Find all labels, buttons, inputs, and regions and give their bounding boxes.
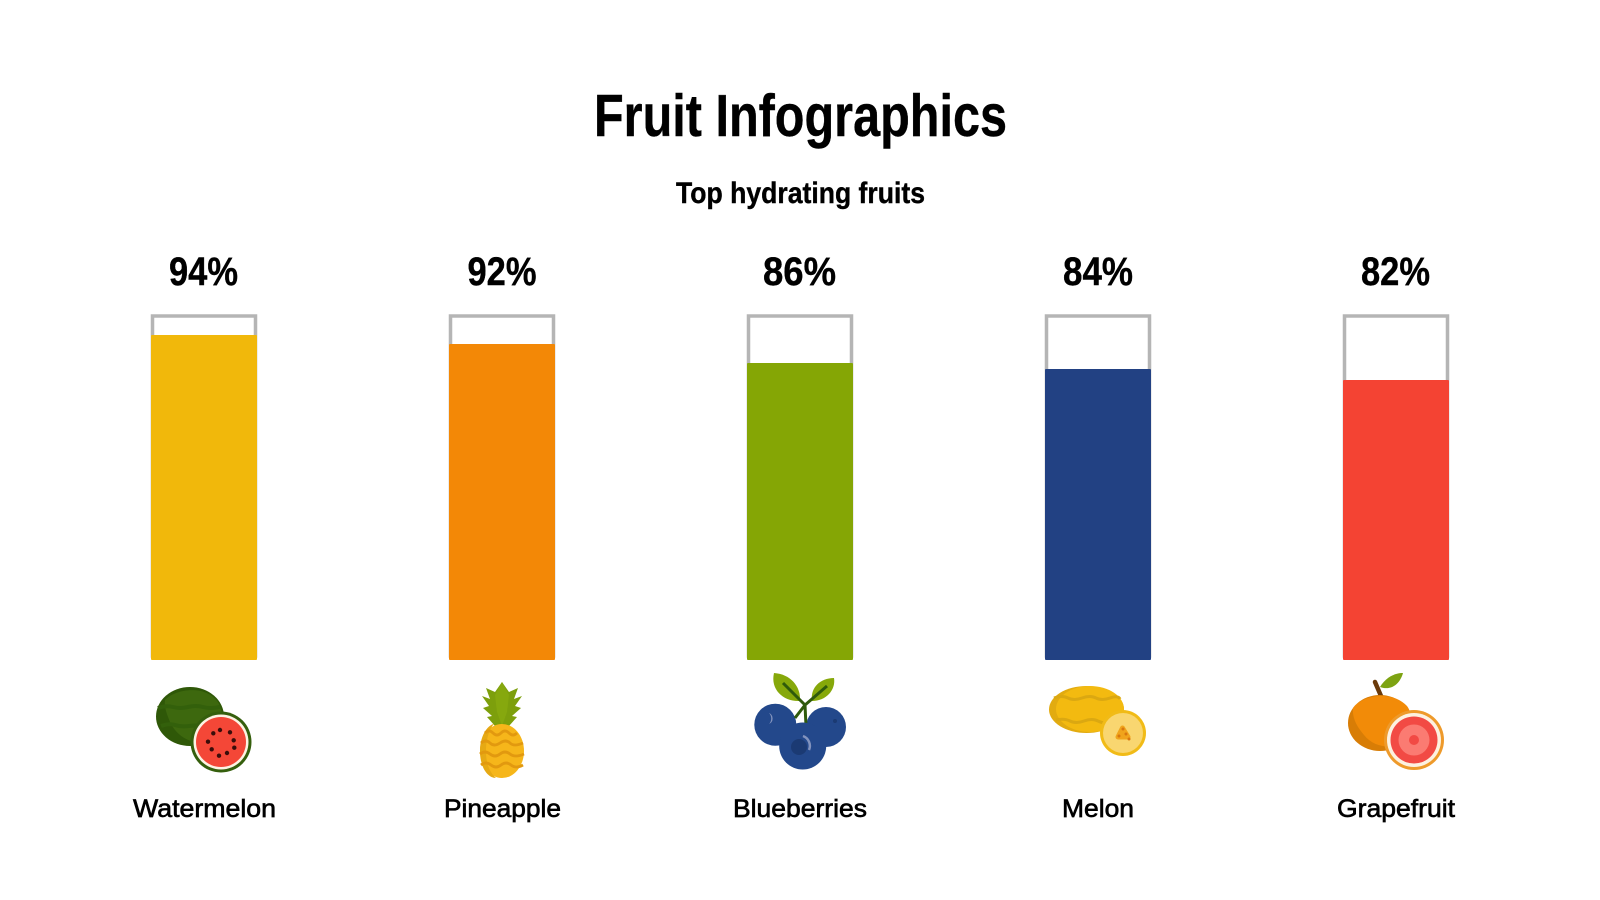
- percentage: blueberries: 86%: [763, 250, 836, 294]
- panel: watermelon column: [133, 250, 276, 823]
- bar fill: watermelon: [151, 335, 257, 660]
- bar outline: watermelon: [152, 316, 256, 656]
- panel: blueberries column: [733, 250, 867, 823]
- label: grapefruit: Grapefruit: [1337, 795, 1455, 823]
- percentage: melon: 84%: [1063, 250, 1133, 294]
- bar fill: melon: [1045, 369, 1151, 660]
- bar outline: melon: [1046, 316, 1150, 656]
- icon: grapefruit: [1348, 673, 1444, 770]
- icon: blueberries: [754, 673, 846, 770]
- label: pineapple: Pineapple: [444, 795, 561, 823]
- bar fill: grapefruit: [1343, 380, 1449, 660]
- icon: pineapple: [480, 682, 524, 778]
- panel: grapefruit column: [1337, 250, 1455, 823]
- subtitle: Top hydrating fruits: [676, 177, 925, 210]
- label: blueberries: Blueberries: [733, 795, 867, 823]
- icon: watermelon: [156, 687, 252, 772]
- bar fill: blueberries: [747, 363, 853, 660]
- bar outline: blueberries: [748, 316, 852, 656]
- title: Fruit Infographics: [594, 83, 1007, 149]
- label: watermelon: Watermelon: [133, 795, 276, 823]
- panel: melon column: [1045, 250, 1151, 823]
- percentage: watermelon: 94%: [169, 250, 238, 294]
- panel: pineapple column: [444, 250, 561, 823]
- icon: melon: [1049, 686, 1146, 756]
- percentage: pineapple: 92%: [468, 250, 536, 294]
- bar outline: pineapple: [450, 316, 554, 656]
- label: melon: Melon: [1062, 795, 1134, 823]
- percentage: grapefruit: 82%: [1361, 250, 1430, 294]
- bar fill: pineapple: [449, 344, 555, 660]
- bar outline: grapefruit: [1344, 316, 1448, 656]
